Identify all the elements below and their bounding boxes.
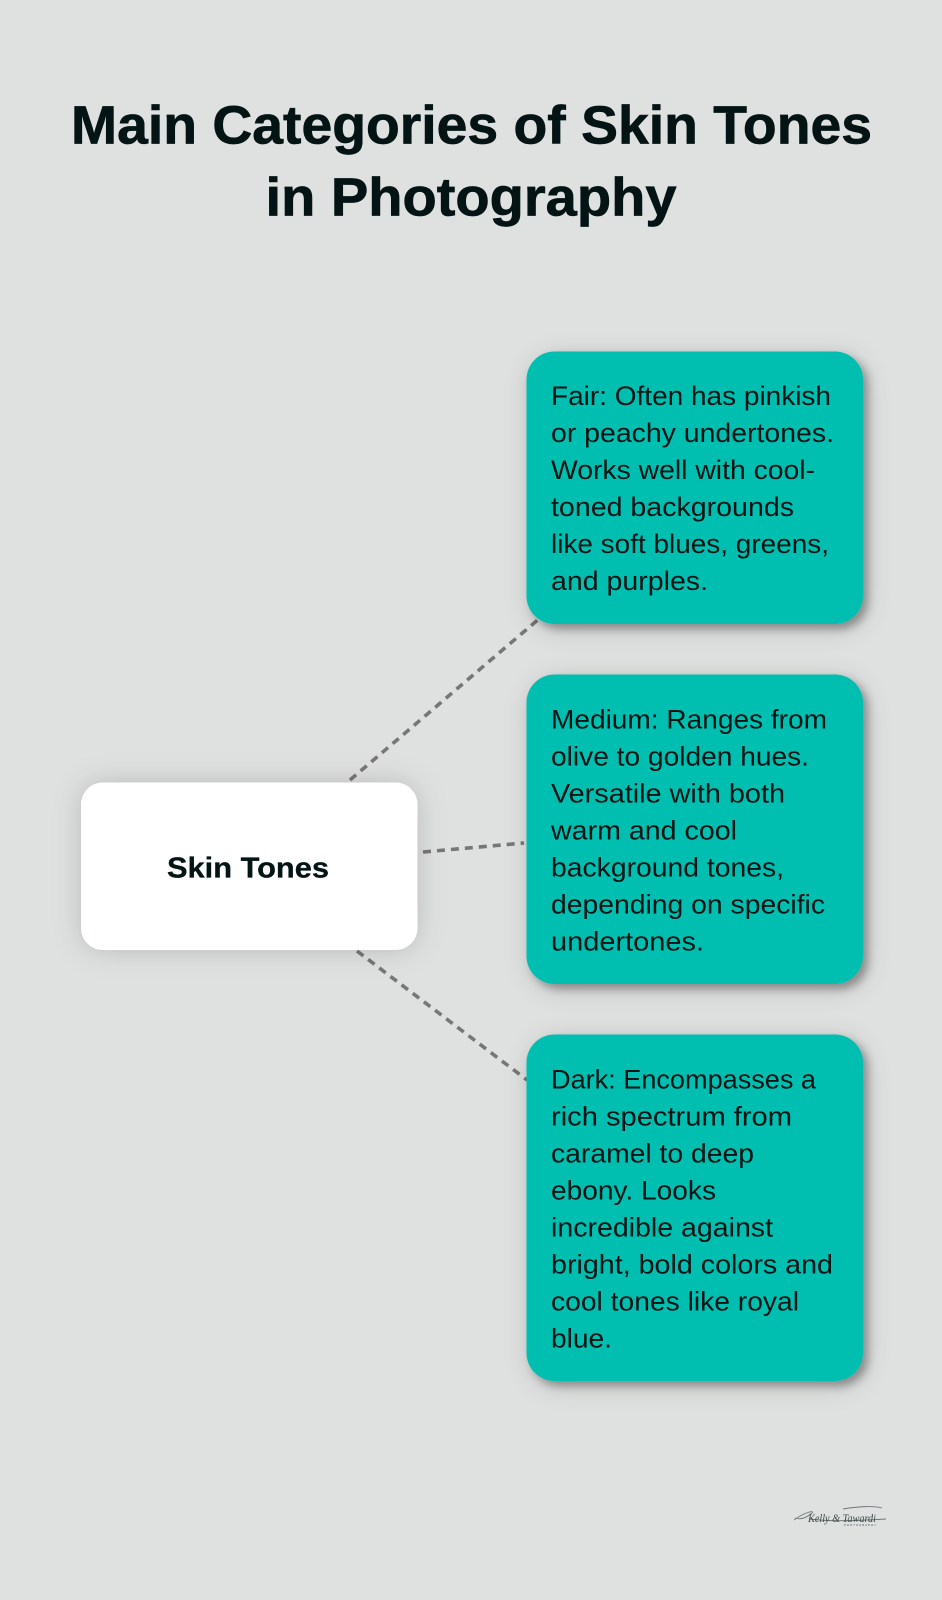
- panel: fair: [526, 352, 863, 624]
- centre node label: Skin Tones: [167, 852, 329, 884]
- dark text: ebony. Looks: [551, 1175, 716, 1205]
- title: [71, 96, 872, 228]
- fair text: Works well with cool-: [551, 455, 815, 485]
- medium text: background tones,: [551, 852, 784, 882]
- dark text: bright, bold colors and: [551, 1249, 833, 1279]
- connector: skin tones to medium: [423, 843, 524, 852]
- panel: skin tones centre node: [81, 782, 418, 950]
- dark text: incredible against: [551, 1212, 774, 1242]
- title: in Photography: [266, 168, 676, 228]
- medium text: [550, 704, 827, 956]
- fair text: Fair: Often has pinkish: [551, 381, 831, 411]
- dark text: Dark: Encompasses a: [551, 1064, 816, 1094]
- connector: skin tones to fair: [350, 618, 540, 780]
- dark text: cool tones like royal: [551, 1286, 799, 1316]
- dark text: rich spectrum from: [551, 1101, 792, 1131]
- medium text: depending on specific: [551, 889, 825, 919]
- fair text: like soft blues, greens,: [551, 529, 829, 559]
- medium text: olive to golden hues.: [551, 741, 809, 771]
- fair text: or peachy undertones.: [551, 418, 834, 448]
- panel: dark: [526, 1034, 863, 1381]
- medium text: warm and cool: [550, 815, 737, 845]
- medium text: Medium: Ranges from: [551, 704, 827, 734]
- connector: skin tones to dark: [357, 951, 527, 1080]
- logo: signature: PHOTOGRAPHY: [844, 1523, 876, 1527]
- medium text: Versatile with both: [551, 778, 785, 808]
- logo: signature: [794, 1507, 886, 1527]
- fair text: toned backgrounds: [551, 492, 794, 522]
- fair text: [551, 381, 834, 596]
- title: Main Categories of Skin Tones: [71, 96, 872, 156]
- medium text: undertones.: [551, 926, 704, 956]
- logo: signature: Kelly & Tawardi: [807, 1511, 876, 1525]
- panel: medium: [526, 674, 863, 984]
- dark text: blue.: [551, 1323, 612, 1353]
- dark text: caramel to deep: [551, 1138, 754, 1168]
- fair text: and purples.: [551, 566, 708, 596]
- dark text: [551, 1064, 833, 1353]
